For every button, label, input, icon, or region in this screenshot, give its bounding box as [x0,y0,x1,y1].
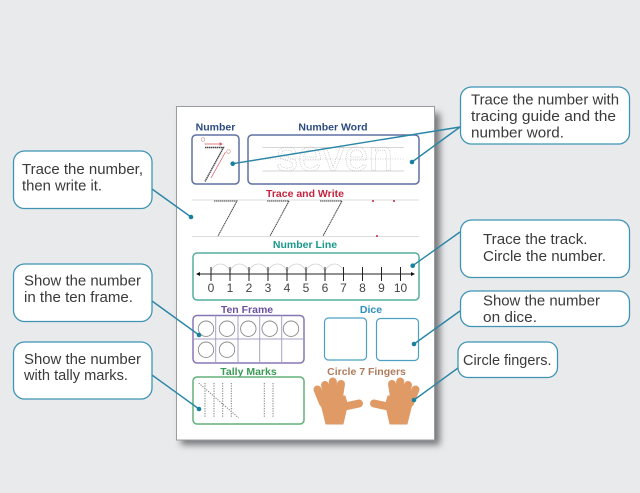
panel: dice boxes [324,318,418,360]
callout: dice: on dice. [483,310,537,326]
icon: left hand [318,382,359,424]
callout: trace then write: then write it. [22,179,102,195]
heading: Dice: Dice [360,304,382,316]
arrow: number callout leader [230,127,460,166]
icon: right hand [374,382,416,424]
callout: circle fingers: Circle fingers. [463,353,552,369]
callout: trace then write: Trace the number, [22,162,143,178]
heading: Number: Number [196,122,235,134]
panel: number line: 8 [359,281,366,295]
callout: ten frame: in the ten frame. [24,290,133,306]
arrow: number line callout leader [410,232,460,268]
arrow: fingers callout leader [412,368,458,402]
heading: Tally Marks: Tally Marks [220,366,277,378]
panel: number line: 2 [246,281,253,295]
worksheet page shadow [181,113,440,445]
callout: ten frame: Show the number [24,274,141,290]
panel: number line: 6 [322,281,329,295]
callout: tracing guide and number word: tracing guide and the [471,109,616,125]
panel: number line: 5 [303,281,310,295]
callout: tally marks: with tally marks. [23,368,128,384]
heading: Number Line: Number Line [273,239,337,251]
panel: number word box: seven [276,132,393,180]
arrow: dice callout leader [412,311,460,346]
callout: trace the track [460,220,630,278]
panel: number line: 3 [265,281,272,295]
arrow: trace and write callout leader [152,189,193,219]
callout: ten frame [14,264,152,322]
callout: trace then write [14,151,152,208]
callout: tracing guide and number word [460,87,630,144]
callout: trace the track: Circle the number. [483,249,606,265]
panel: number box [192,135,239,184]
arrow: ten frame callout leader [152,301,201,337]
arrow: number word callout leader [410,127,460,164]
panel: number word box [248,132,419,184]
panel: tally marks [193,377,304,424]
panel: number line: 0 [208,281,215,295]
panel: number line [193,253,419,300]
panel: number line: 10 [394,281,407,295]
panel: trace and write row [192,200,419,237]
callout: dice [460,291,630,326]
panel: number line: 1 [227,281,234,295]
heading: Circle 7 Fingers: Circle 7 Fingers [327,366,406,378]
callout: circle fingers [458,342,558,378]
callout: tracing guide and number word: Trace the number with [471,92,619,108]
panel: number line: 9 [378,281,385,295]
panel: worksheet page [176,106,434,440]
panel: number line: 4 [284,281,291,295]
callout: tally marks [14,342,152,399]
callout: tracing guide and number word: number word. [471,125,564,141]
panel: ten frame [193,316,304,363]
heading: Trace and Write: Trace and Write [266,188,344,200]
panel: number line: 7 [340,281,347,295]
callout: dice: Show the number [483,294,600,310]
callout: tally marks: Show the number [24,352,141,368]
heading: Number Word: Number Word [298,122,368,134]
callout: trace the track: Trace the track. [483,232,588,248]
arrow: tally callout leader [152,375,201,411]
heading: Ten Frame: Ten Frame [221,304,273,316]
